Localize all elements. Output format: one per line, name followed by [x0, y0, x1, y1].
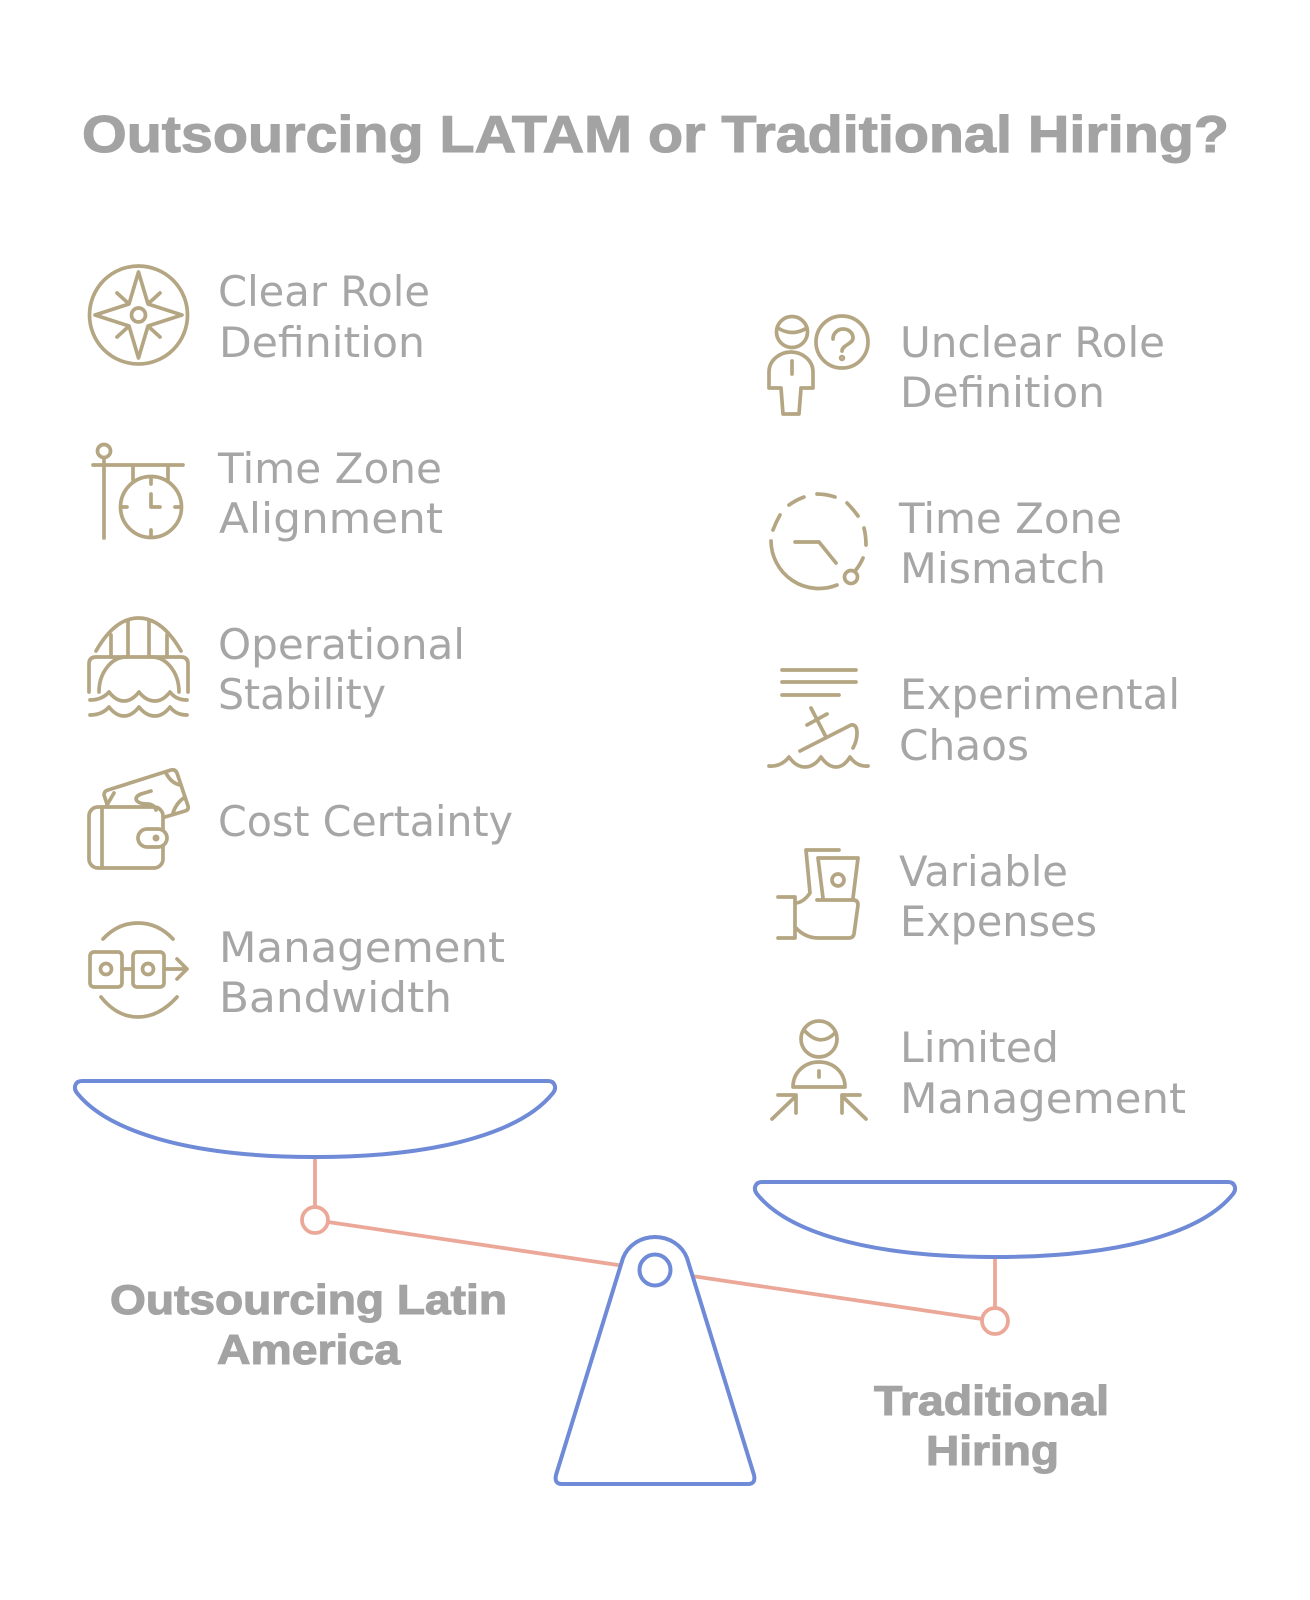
left pan [75, 1081, 555, 1157]
item: cost certainty [89, 770, 513, 868]
panel: outsourcing factors [89, 266, 513, 1022]
text: limited management: Limited [900, 1023, 1059, 1072]
right hanger [993, 1257, 997, 1308]
text: time zone mismatch: Mismatch [900, 544, 1106, 593]
text: management bandwidth: Bandwidth [219, 973, 452, 1022]
balance scale [75, 1081, 1235, 1484]
text: cost certainty: Cost Certainty [218, 797, 513, 846]
text: experimental chaos: Experimental [900, 670, 1180, 719]
icon: person with arrows [772, 1021, 866, 1119]
label: traditional hiring: Traditional [874, 1377, 1109, 1424]
icon: broken clock [771, 494, 866, 589]
item: clear role definition [90, 266, 430, 367]
icon: hanging clock [93, 444, 183, 538]
text: operational stability: Operational [218, 620, 465, 669]
panel: traditional hiring factors [769, 316, 1186, 1123]
left hanger [313, 1157, 317, 1207]
text: management bandwidth: Management [219, 923, 505, 972]
text: unclear role definition: Definition [900, 368, 1105, 417]
item: time zone alignment [93, 444, 443, 543]
icon: linked boxes with arrow [90, 923, 187, 1017]
label: outsourcing latin america: Outsourcing Latin [110, 1276, 507, 1323]
item: limited management [772, 1021, 1186, 1123]
scale beam [328, 1222, 982, 1319]
item: unclear role definition [769, 316, 1165, 417]
icon: compass [90, 266, 188, 364]
item: management bandwidth [90, 923, 505, 1022]
text: time zone alignment: Time Zone [217, 444, 442, 493]
right ring [982, 1308, 1008, 1334]
label: traditional hiring: Hiring [926, 1427, 1059, 1474]
icon: hand holding cash [778, 850, 858, 938]
item: time zone mismatch [771, 494, 1122, 593]
right pan [755, 1182, 1235, 1257]
text: clear role definition: Definition [219, 318, 425, 367]
icon: bridge over water [89, 618, 188, 716]
item: experimental chaos [769, 670, 1180, 770]
text: variable expenses: Expenses [900, 897, 1097, 946]
text: clear role definition: Clear Role [218, 267, 430, 316]
text: unclear role definition: Unclear Role [900, 318, 1165, 367]
text: time zone mismatch: Time Zone [898, 494, 1122, 543]
left ring [302, 1207, 328, 1233]
item: operational stability [89, 618, 465, 719]
text: experimental chaos: Chaos [899, 721, 1029, 770]
icon: wallet with cash [89, 770, 188, 868]
label: outsourcing latin america: America [217, 1326, 401, 1373]
text: limited management: Management [900, 1074, 1186, 1123]
pivot [640, 1254, 670, 1286]
text: time zone alignment: Alignment [219, 494, 443, 543]
title: Outsourcing LATAM or Traditional Hiring? [82, 106, 1229, 164]
icon: person with question mark [769, 316, 868, 414]
fulcrum [556, 1237, 754, 1484]
text: variable expenses: Variable [899, 847, 1068, 896]
text: operational stability: Stability [218, 670, 386, 719]
icon: sinking ship [769, 670, 868, 767]
item: variable expenses [778, 847, 1097, 946]
